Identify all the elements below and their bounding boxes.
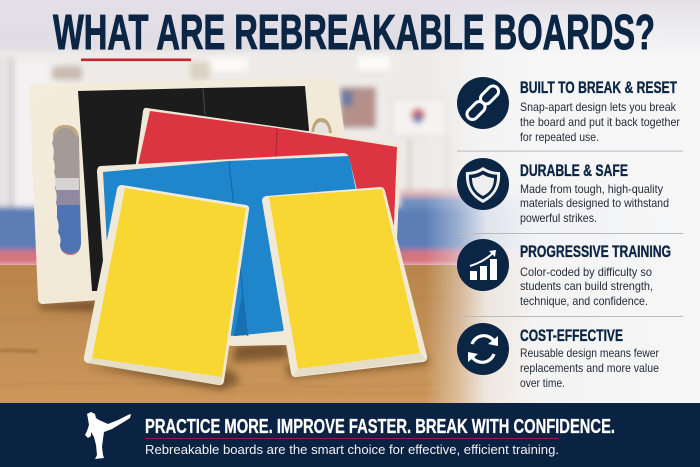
description: technique, and confidence. [520, 294, 648, 308]
icon: chain link [457, 77, 509, 129]
description: materials designed to withstand [520, 196, 669, 210]
icon: rising bar chart [457, 239, 509, 291]
icon: shield [457, 158, 509, 210]
description [520, 100, 680, 144]
board: yellow left [84, 185, 249, 385]
feature: durable and safe [457, 158, 669, 225]
description [520, 346, 659, 390]
heading: COST-EFFECTIVE [520, 326, 623, 345]
icon: cycle arrows [457, 323, 509, 375]
bottom banner [0, 403, 700, 467]
feature: cost-effective [457, 323, 659, 390]
product photo: stacked rebreakable boards [29, 78, 430, 390]
board: black, cream frame [29, 78, 400, 304]
description: for repeated use. [520, 130, 599, 144]
description: students can build strength, [520, 279, 653, 293]
description [520, 182, 669, 225]
description: Color-coded by difficulty so [520, 265, 652, 279]
feature: progressive training [457, 239, 671, 308]
description: the board and put it back together [520, 115, 680, 129]
board: yellow right [262, 187, 427, 377]
board: blue [97, 153, 357, 346]
description: Reusable design means fewer [520, 346, 659, 360]
description: Made from tough, high-quality [520, 182, 663, 196]
banner subline: Rebreakable boards are the smart choice for effective, efficient training. [145, 443, 559, 457]
feature: built to break and reset [457, 77, 680, 144]
shadows under boards [38, 300, 430, 390]
title underline [81, 58, 191, 61]
description: Snap-apart design lets you break [520, 100, 677, 114]
right-side white fade panel [425, 0, 700, 403]
heading: DURABLE & SAFE [520, 161, 628, 180]
icon: martial artist kicking silhouette [85, 412, 131, 459]
description: powerful strikes. [520, 211, 597, 225]
description [520, 265, 653, 308]
description: over time. [520, 376, 565, 390]
board: red [120, 108, 401, 240]
description: replacements and more value [520, 361, 659, 375]
